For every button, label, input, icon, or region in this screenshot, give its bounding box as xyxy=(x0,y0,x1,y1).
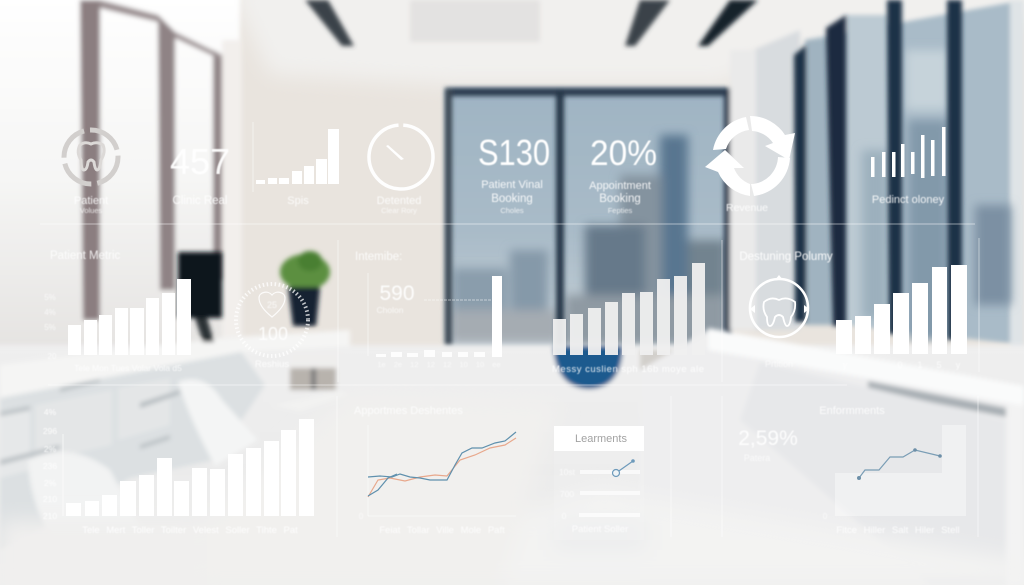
left window xyxy=(0,0,240,360)
panel: appointment line chart: Feiat Tollar Ville Mole Paft xyxy=(379,525,505,536)
KPI: 457: Clinic Real xyxy=(173,195,227,207)
KPI: 457: 457 xyxy=(170,141,230,182)
panel: enformments: Enformments xyxy=(819,405,885,417)
panel: bottom-left bar chart: 210 xyxy=(43,511,57,521)
panel: destuning polumy: y xyxy=(843,360,848,370)
KPI: mini bar chart: Spis xyxy=(287,195,309,207)
mini slider line xyxy=(616,461,633,473)
plant xyxy=(280,254,330,290)
center desk legs xyxy=(290,352,338,368)
KPI: S130: Choles xyxy=(500,206,524,215)
KPI: 20%: Fepties xyxy=(608,206,633,215)
panel: enformments: Fitce Hiller Salt Hiler Stell xyxy=(836,525,960,536)
blue ball xyxy=(553,346,623,389)
bar chart: center patient bars xyxy=(552,263,705,375)
panel: learnments: 10st xyxy=(559,467,576,477)
panel: bottom-left bar chart xyxy=(43,407,314,536)
panel: learnments: Patient Soller xyxy=(572,524,628,535)
panel: destuning polumy: 1 xyxy=(917,360,923,370)
panel: patient metric: 5% xyxy=(44,293,56,302)
bar chart: monthly xyxy=(66,419,314,516)
panel: bottom-left bar chart: 296 xyxy=(43,426,57,436)
panel: learnments xyxy=(554,426,644,540)
KPI: 20%: Appointment xyxy=(589,180,651,192)
KPI: mini bar chart xyxy=(256,129,339,207)
panel dividers xyxy=(40,122,979,537)
panel: destuning polumy: Destuning Polumy xyxy=(739,251,833,263)
panel: heart radial gauge: 100 xyxy=(258,324,288,344)
panel: bottom-left bar chart: 210 xyxy=(43,494,57,504)
panel: interribe: Intemibe: xyxy=(355,251,402,263)
panel: destuning polumy: 0 xyxy=(897,360,903,370)
bar chart: patient metric xyxy=(68,279,191,355)
bar chart: center patient bars: Messy cuslien sph 16b moye ale xyxy=(552,364,704,375)
center window xyxy=(445,88,730,350)
panel: learnments: 0 xyxy=(562,511,567,521)
KPI: gauge: Clear Rory xyxy=(381,206,417,215)
KPI: 20% xyxy=(589,134,657,215)
panel: bottom-left bar chart: 236 xyxy=(43,461,57,471)
panel: destuning polumy: 5 xyxy=(936,360,942,370)
panel: destuning polumy: y xyxy=(956,360,961,370)
panel: enformments: Patera xyxy=(744,453,770,463)
right side columns xyxy=(730,30,800,330)
icon: revenue cycle arrows: Revenue xyxy=(726,202,768,214)
KPI: 457 xyxy=(170,141,230,207)
panel: bottom-left bar chart: 2% xyxy=(44,444,57,454)
bar chart: right xyxy=(836,265,967,354)
panel: interribe: 590 xyxy=(379,282,415,305)
panel: heart radial gauge: 25 xyxy=(267,300,277,310)
panel: destuning polumy: Prtition xyxy=(765,359,793,369)
KPI: 20%: Booking xyxy=(599,193,641,205)
icon: revenue cycle arrows xyxy=(705,116,795,214)
panel: patient metric: Tele Mon Tues Volar Vola d5 xyxy=(74,363,182,373)
KPI: S130: Booking xyxy=(491,193,533,205)
left cabinets xyxy=(0,350,265,550)
KPI: tooth ring icon with Patient label xyxy=(64,130,118,215)
panel: interribe: 1e 2e 12 12 12 10 10 ee xyxy=(377,360,501,369)
area chart xyxy=(835,473,966,516)
icon: tooth ring xyxy=(750,275,809,337)
KPI: Pedinct volume bars: Pedinct oloney xyxy=(872,194,945,206)
line chart xyxy=(368,432,516,497)
KPI: 20%: 20% xyxy=(590,134,657,173)
panel: bottom-left bar chart: Tele Mert Toller Toilter Velest Soller Tihte Pat xyxy=(82,525,298,536)
panel: bottom-left bar chart: 2% xyxy=(44,478,57,488)
panel: enformments: 0 xyxy=(823,512,828,521)
KPI: S130: Patient Vinal xyxy=(481,179,543,191)
KPI: tooth ring icon with Patient label: Volues xyxy=(80,206,103,215)
header box xyxy=(554,426,644,451)
panel: appointment line chart: Apportmes Deshentes xyxy=(354,405,463,417)
panel: learnments: 700 xyxy=(560,489,574,499)
label: patient: Patient xyxy=(74,195,108,207)
panel: interribe xyxy=(355,251,502,369)
panel: enformments: 2,59% xyxy=(738,427,798,450)
monitor xyxy=(178,252,222,318)
bar chart: interribe xyxy=(376,276,502,357)
KPI: gauge: Detented xyxy=(377,195,421,207)
chairs xyxy=(28,452,150,550)
panel: interribe: Cholon xyxy=(377,305,404,315)
icon: tooth in ring xyxy=(64,130,118,184)
panel: patient metric: 20 xyxy=(48,352,57,361)
panel: patient metric: Patient Metric xyxy=(50,250,121,262)
right counter xyxy=(640,330,1024,585)
desk top xyxy=(0,330,350,398)
panel: learnments: Learments xyxy=(575,433,627,445)
panel: heart radial gauge xyxy=(236,284,308,370)
panel: patient metric: 5% xyxy=(44,323,56,332)
KPI: Pedinct volume bars xyxy=(871,127,946,206)
overlay dashboard xyxy=(40,116,979,540)
panel: enformments xyxy=(738,405,966,536)
KPI: S130: S130 xyxy=(478,132,550,173)
panel: appointment line chart xyxy=(354,405,516,536)
panel: heart radial gauge: Reshius xyxy=(255,359,289,370)
KPI: gauge xyxy=(367,123,435,215)
panel: patient metric: 4% xyxy=(44,308,56,317)
panel: patient metric xyxy=(44,250,191,373)
panel: bottom-left bar chart: 4% xyxy=(44,407,57,417)
panel: destuning polumy xyxy=(739,251,967,370)
KPI: S130 xyxy=(478,132,550,215)
panel: appointment line chart: 0 xyxy=(359,512,364,521)
floor xyxy=(0,345,1024,585)
